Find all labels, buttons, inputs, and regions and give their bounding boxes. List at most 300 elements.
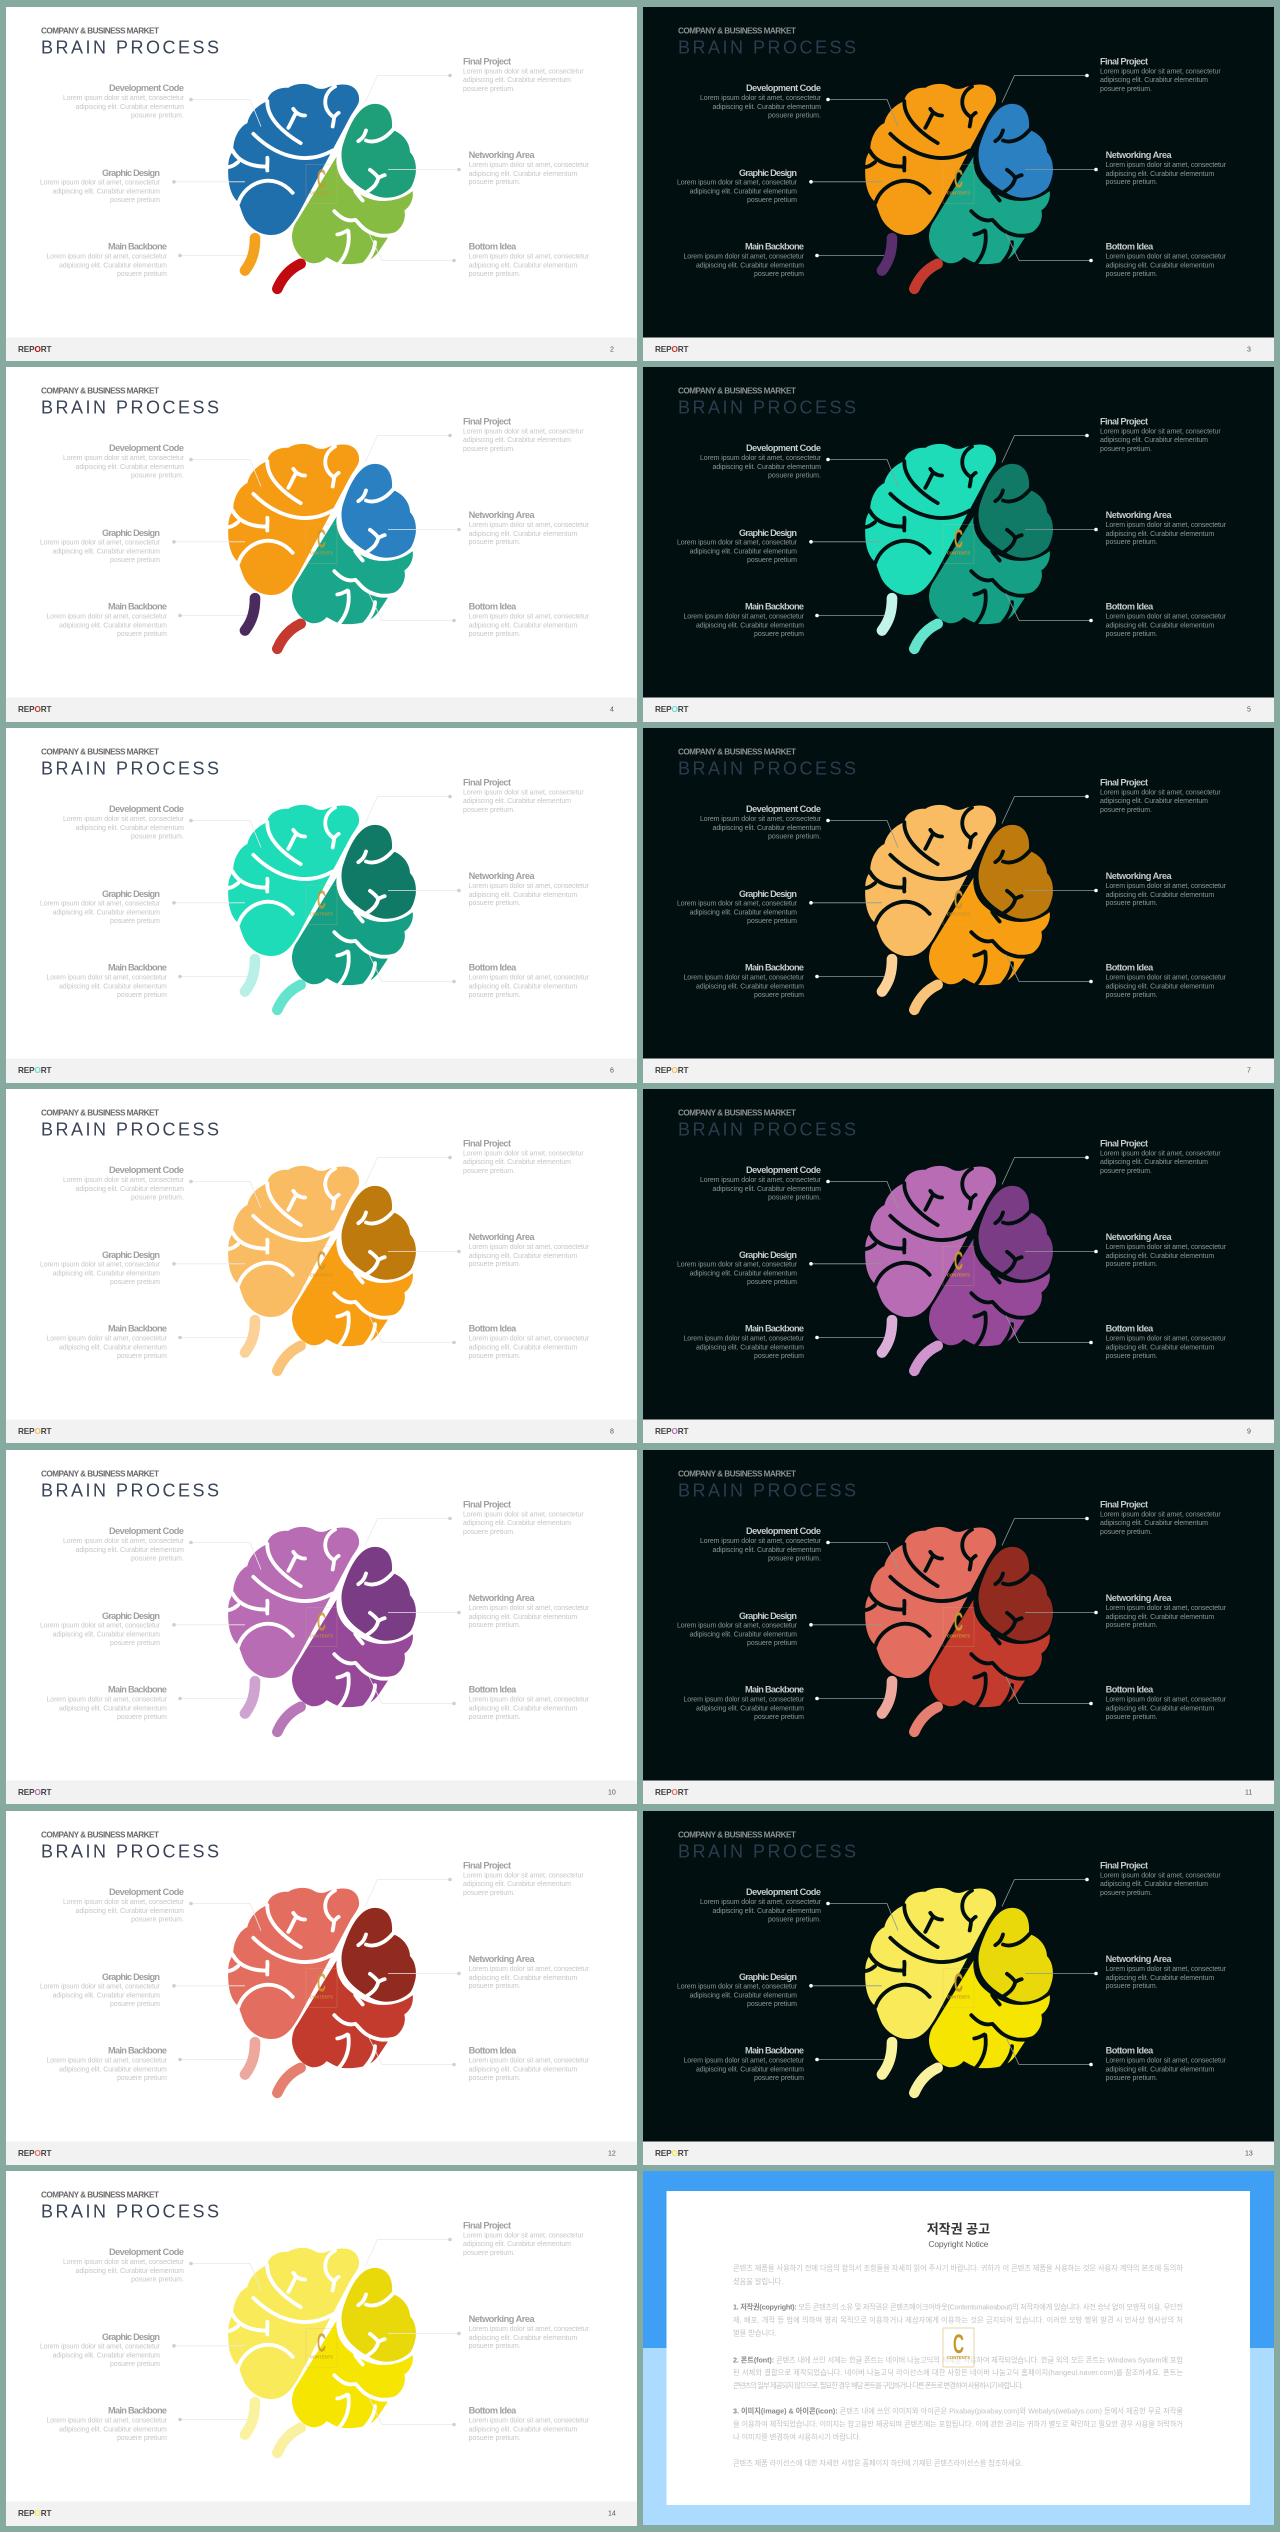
label: Final Project: adipiscing elit. Curabitur elementum (1100, 1159, 1208, 1166)
center logo mark: C (954, 1967, 963, 1997)
brain diagram (864, 444, 1053, 649)
connector: Networking Area (1025, 528, 1098, 532)
label: Bottom Idea: adipiscing elit. Curabitur elementum (1106, 1344, 1214, 1351)
slide background (6, 6, 637, 362)
center logo mark: C (317, 1245, 326, 1275)
label: Final Project (463, 1499, 584, 1536)
center logo mark: CONTENTS (947, 1272, 970, 1277)
center logo mark (306, 885, 337, 925)
label: Main Backbone: adipiscing elit. Curabitur elementum (59, 262, 167, 269)
footer bar: REPORT (655, 1788, 688, 1797)
label: Networking Area: adipiscing elit. Curabitur elementum (1106, 170, 1214, 177)
label: Networking Area: adipiscing elit. Curabitur elementum (469, 1974, 577, 1981)
label: Networking Area: Lorem ipsum dolor sit amet, consectetur (469, 1244, 590, 1251)
connector: Bottom Idea (1006, 2037, 1093, 2066)
label: Final Project: Final Project (463, 1139, 511, 1149)
label: Final Project: Lorem ipsum dolor sit amet, consectetur (1100, 1511, 1221, 1518)
center logo mark (943, 524, 974, 564)
label: Networking Area: adipiscing elit. Curabitur elementum (1106, 1613, 1214, 1620)
center logo mark: C (317, 2328, 326, 2358)
label: Bottom Idea: adipiscing elit. Curabitur elementum (469, 623, 577, 630)
label: Bottom Idea: Bottom Idea (469, 1324, 517, 1334)
footer bar (6, 2502, 637, 2527)
label: Development Code: Lorem ipsum dolor sit amet, consectetur (63, 94, 185, 102)
label: Development Code (700, 804, 822, 841)
label: Main Backbone: Main Backbone (108, 241, 167, 251)
label: Graphic Design (40, 1611, 161, 1647)
slide background (643, 1089, 1274, 1444)
connector: Networking Area (388, 1610, 461, 1614)
label: Main Backbone: posuere pretium (754, 1353, 804, 1360)
label: Networking Area: Lorem ipsum dolor sit amet, consectetur (469, 162, 590, 168)
label: Main Backbone (684, 2045, 805, 2082)
label: Final Project: Lorem ipsum dolor sit amet, consectetur (463, 68, 584, 75)
label: Development Code: posuere pretium. (131, 834, 184, 841)
subtitle: COMPANY & BUSINESS MARKET (41, 1469, 159, 1478)
connector: Main Backbone (815, 1336, 884, 1339)
title: BRAIN PROCESS (678, 37, 856, 57)
label: Bottom Idea (1106, 2045, 1227, 2082)
label: Main Backbone: posuere pretium (117, 992, 167, 999)
title: BRAIN PROCESS (678, 398, 856, 418)
label: Development Code: adipiscing elit. Curabitur elementum (712, 104, 821, 110)
label: Main Backbone: posuere pretium (117, 1353, 167, 1360)
label: Networking Area: posuere pretium. (469, 900, 521, 907)
label: Graphic Design (40, 528, 161, 564)
blue background top (643, 2171, 1274, 2348)
label: Networking Area: posuere pretium. (1106, 1261, 1158, 1268)
label: Graphic Design: adipiscing elit. Curabitur elementum (690, 549, 797, 556)
label: Bottom Idea: adipiscing elit. Curabitur elementum (1106, 2066, 1214, 2073)
slide 2: blue green brain on white (6, 7, 637, 361)
label: Graphic Design: posuere pretium (747, 557, 797, 564)
label: Final Project: adipiscing elit. Curabitur elementum (463, 77, 571, 84)
notice body text: 3. 이미지(image) & 아이콘(icon): 콘텐츠 내에 쓰인 이미지와 아이콘은 Pixabay(pixabay.com)와 Webalys(webalys.com) 등에서 제공한 무료 저작물 (733, 2406, 1183, 2416)
label: Graphic Design: Lorem ipsum dolor sit amet, consectetur (677, 179, 798, 186)
center logo mark: CONTENTS (310, 190, 333, 195)
connector: Main Backbone (178, 1696, 247, 1700)
notice title: 저작권 공고 (927, 2222, 990, 2236)
connector: Graphic Design (172, 1623, 245, 1626)
label: Development Code (63, 1526, 185, 1562)
footer bar: 11 (1245, 1789, 1252, 1796)
label: Development Code: Development Code (109, 443, 184, 453)
footer bar (6, 698, 637, 723)
label: Bottom Idea: posuere pretium. (469, 1714, 521, 1721)
connector: Bottom Idea (369, 1315, 456, 1344)
label: Main Backbone: Lorem ipsum dolor sit amet, consectetur (46, 1335, 168, 1342)
footer bar (643, 337, 1274, 362)
label: Final Project: posuere pretium. (1100, 1529, 1152, 1536)
label: Networking Area (1106, 1954, 1227, 1990)
label: Main Backbone: Lorem ipsum dolor sit amet, consectetur (46, 975, 168, 982)
title: BRAIN PROCESS (41, 398, 219, 418)
label: Development Code: adipiscing elit. Curabitur elementum (76, 1186, 184, 1193)
label: Bottom Idea: posuere pretium. (1106, 631, 1158, 638)
label: Final Project: Lorem ipsum dolor sit amet, consectetur (463, 2233, 584, 2240)
slide 9: purple brain on dark (643, 1089, 1274, 1443)
label: Networking Area: Lorem ipsum dolor sit amet, consectetur (1106, 522, 1227, 529)
label: Graphic Design (677, 168, 798, 204)
center logo mark: CONTENTS (310, 1633, 333, 1638)
label: Bottom Idea: Lorem ipsum dolor sit amet, consectetur (469, 1335, 590, 1342)
brain diagram (227, 444, 416, 649)
connector: Main Backbone (178, 2057, 247, 2061)
label: Final Project: posuere pretium. (463, 446, 515, 453)
label: Graphic Design: Lorem ipsum dolor sit amet, consectetur (677, 1622, 798, 1629)
center logo mark: C (317, 1606, 326, 1636)
connector: Main Backbone (178, 1336, 247, 1339)
label: Bottom Idea: posuere pretium. (469, 992, 521, 999)
brain diagram (227, 1887, 416, 2092)
slide background (6, 728, 637, 1083)
label: Final Project: adipiscing elit. Curabitur elementum (1100, 437, 1208, 444)
label: Final Project: Final Project (463, 56, 511, 66)
center logo mark (306, 2328, 337, 2368)
label: Main Backbone: posuere pretium (754, 2074, 804, 2082)
label: Networking Area: Networking Area (469, 1232, 535, 1242)
label: Development Code (63, 82, 185, 119)
label: Graphic Design: adipiscing elit. Curabitur elementum (53, 2353, 160, 2360)
label: Development Code: adipiscing elit. Curabitur elementum (76, 1908, 184, 1914)
slide 12: red brain on white (6, 1811, 637, 2165)
label: Bottom Idea: adipiscing elit. Curabitur elementum (469, 1344, 577, 1351)
label: Bottom Idea: adipiscing elit. Curabitur elementum (1106, 1705, 1214, 1712)
label: Graphic Design: Lorem ipsum dolor sit amet, consectetur (40, 2344, 161, 2351)
light blue background bottom (643, 2348, 1274, 2525)
label: Final Project (463, 1860, 584, 1896)
connector: Graphic Design (809, 1262, 882, 1265)
label: Development Code: Lorem ipsum dolor sit amet, consectetur (700, 1538, 822, 1545)
footer bar: 8 (610, 1428, 614, 1435)
connector: Development Code (189, 458, 261, 487)
connector: Development Code (189, 819, 261, 848)
brain diagram (227, 83, 416, 288)
label: Networking Area: Networking Area (469, 2314, 535, 2324)
label: Bottom Idea (1106, 602, 1227, 638)
footer bar: 14 (608, 2511, 616, 2518)
label: Bottom Idea: Lorem ipsum dolor sit amet, consectetur (469, 2057, 590, 2064)
label: Main Backbone (46, 241, 168, 278)
footer bar (643, 1419, 1274, 1444)
footer bar: REPORT (18, 1066, 52, 1075)
label: Final Project: Final Project (463, 417, 511, 427)
label: Final Project (1100, 1860, 1221, 1896)
label: Bottom Idea: adipiscing elit. Curabitur elementum (1106, 262, 1214, 269)
connector: Bottom Idea (369, 2398, 456, 2427)
label: Development Code: Development Code (746, 804, 821, 814)
label: Main Backbone: Lorem ipsum dolor sit amet, consectetur (684, 975, 805, 982)
label: Final Project: Final Project (463, 1860, 511, 1870)
label: Networking Area: posuere pretium. (1106, 179, 1158, 186)
label: Main Backbone: Main Backbone (745, 963, 804, 973)
label: Main Backbone: Lorem ipsum dolor sit amet, consectetur (684, 1696, 805, 1703)
connector: Bottom Idea (1006, 233, 1093, 262)
label: Graphic Design: adipiscing elit. Curabitur elementum (690, 1631, 797, 1638)
label: Development Code (63, 443, 185, 480)
label: Bottom Idea: posuere pretium. (469, 1353, 521, 1360)
footer bar (6, 2141, 637, 2166)
label: Main Backbone: Lorem ipsum dolor sit amet, consectetur (46, 614, 168, 621)
center logo mark: CONTENTS (947, 2355, 970, 2360)
label: Development Code: adipiscing elit. Curabitur elementum (76, 1547, 184, 1554)
label: Development Code (700, 1526, 822, 1562)
connector: Final Project (1002, 795, 1089, 824)
subtitle: COMPANY & BUSINESS MARKET (41, 748, 159, 757)
label: Final Project: Lorem ipsum dolor sit amet, consectetur (463, 1872, 584, 1879)
footer bar: REPORT (655, 1066, 688, 1075)
label: Main Backbone: posuere pretium (754, 1714, 804, 1721)
label: Final Project (1100, 56, 1221, 92)
label: Development Code: Lorem ipsum dolor sit amet, consectetur (63, 1177, 185, 1184)
label: Final Project: Final Project (463, 2221, 511, 2231)
connector: Final Project (1002, 1516, 1089, 1545)
label: Main Backbone (684, 241, 805, 278)
label: Graphic Design (677, 1611, 798, 1647)
label: Final Project: adipiscing elit. Curabitur elementum (463, 1520, 571, 1527)
label: Bottom Idea: adipiscing elit. Curabitur elementum (469, 262, 577, 269)
label: Final Project: Lorem ipsum dolor sit amet, consectetur (1100, 1872, 1221, 1879)
label: Bottom Idea: Bottom Idea (1106, 602, 1154, 612)
connector: Graphic Design (172, 540, 245, 544)
title: BRAIN PROCESS (678, 1480, 856, 1500)
footer bar: 6 (610, 1068, 614, 1075)
label: Graphic Design: posuere pretium (110, 1640, 160, 1647)
label: Main Backbone: posuere pretium (117, 1714, 167, 1721)
footer bar: REPORT (655, 344, 688, 354)
label: Main Backbone: Lorem ipsum dolor sit amet, consectetur (684, 253, 805, 260)
connector: Networking Area (388, 1971, 461, 1975)
label: Development Code: Development Code (109, 804, 184, 814)
label: Development Code: Development Code (746, 1165, 821, 1175)
center logo mark: CONTENTS (310, 1272, 333, 1277)
center logo mark (306, 1245, 337, 1285)
label: Networking Area: Networking Area (1106, 871, 1172, 881)
label: Final Project: posuere pretium. (1100, 85, 1152, 92)
label: Graphic Design: Graphic Design (739, 528, 797, 538)
footer bar: 7 (1247, 1068, 1251, 1075)
label: Graphic Design: posuere pretium (110, 2361, 160, 2368)
subtitle: COMPANY & BUSINESS MARKET (41, 387, 159, 396)
label: Bottom Idea: Bottom Idea (469, 1684, 517, 1694)
label: Bottom Idea: posuere pretium. (469, 2074, 521, 2082)
center logo mark (943, 1245, 974, 1285)
title: BRAIN PROCESS (41, 37, 219, 57)
label: Final Project: posuere pretium. (1100, 1168, 1152, 1175)
label: Development Code: Lorem ipsum dolor sit amet, consectetur (700, 1898, 822, 1906)
label: Final Project: Final Project (1100, 417, 1148, 427)
label: Final Project (463, 56, 584, 92)
label: Development Code: posuere pretium. (131, 1916, 184, 1923)
label: Development Code: Development Code (746, 82, 821, 92)
label: Networking Area: adipiscing elit. Curabitur elementum (469, 2335, 577, 2342)
label: Final Project: posuere pretium. (1100, 1889, 1152, 1896)
label: Main Backbone (46, 1684, 168, 1721)
label: Development Code: Development Code (109, 82, 184, 92)
center logo mark: C (317, 885, 326, 915)
title: BRAIN PROCESS (41, 1480, 219, 1500)
subtitle: COMPANY & BUSINESS MARKET (678, 26, 796, 35)
title: BRAIN PROCESS (678, 1841, 856, 1861)
footer bar: REPORT (18, 1427, 52, 1436)
label: Graphic Design: Lorem ipsum dolor sit amet, consectetur (677, 1261, 798, 1268)
label: Graphic Design: posuere pretium (747, 1279, 797, 1286)
notice body text (733, 2264, 1183, 2468)
connector: Final Project (365, 434, 452, 463)
label: Final Project: Lorem ipsum dolor sit amet, consectetur (1100, 68, 1221, 75)
label: Graphic Design (677, 889, 798, 925)
label: Development Code: adipiscing elit. Curabitur elementum (76, 2268, 184, 2275)
label: Networking Area: Networking Area (1106, 1954, 1172, 1964)
label: Networking Area: Networking Area (469, 871, 535, 881)
label: Development Code: posuere pretium. (131, 1194, 184, 1201)
center logo mark: CONTENTS (947, 1994, 970, 1999)
subtitle: COMPANY & BUSINESS MARKET (678, 1108, 796, 1117)
center logo mark: C (317, 1967, 326, 1997)
center logo mark: CONTENTS (310, 551, 333, 556)
connector: Main Backbone (815, 253, 884, 257)
label: Networking Area: posuere pretium. (469, 539, 521, 546)
label: Networking Area: posuere pretium. (469, 1622, 521, 1629)
slide background (643, 1450, 1274, 1805)
label: Bottom Idea: Bottom Idea (1106, 963, 1154, 973)
footer bar: REPORT (655, 1427, 688, 1436)
label: Graphic Design: Lorem ipsum dolor sit amet, consectetur (677, 540, 798, 547)
label: Final Project: Final Project (463, 1499, 511, 1509)
slide 5: teal brain on dark (643, 367, 1274, 722)
connector: Development Code (189, 97, 261, 126)
label: Bottom Idea: Lorem ipsum dolor sit amet, consectetur (1106, 2057, 1227, 2064)
connector: Development Code (826, 1901, 898, 1930)
footer bar: 5 (1247, 707, 1251, 714)
connector: Bottom Idea (369, 955, 456, 983)
brain diagram (864, 1527, 1053, 1731)
connector: Bottom Idea (369, 2037, 456, 2066)
center logo mark: C (953, 2329, 964, 2359)
slide background (6, 2171, 637, 2526)
notice body text: 벌을 받습니다. (733, 2328, 777, 2338)
slide background (643, 367, 1274, 722)
label: Development Code (63, 804, 185, 841)
label: Main Backbone: Main Backbone (745, 1324, 804, 1334)
slide 6: teal brain on white (6, 728, 637, 1083)
label: Networking Area (469, 1232, 590, 1268)
label: Main Backbone: adipiscing elit. Curabitur elementum (696, 1705, 804, 1712)
label: Development Code: adipiscing elit. Curabitur elementum (76, 825, 184, 832)
footer bar: REPORT (18, 705, 52, 714)
brain diagram (227, 2248, 416, 2453)
center logo mark: CONTENTS (947, 912, 970, 917)
connector: Main Backbone (815, 1696, 884, 1700)
label: Graphic Design: Graphic Design (102, 1250, 160, 1260)
label: Bottom Idea: Bottom Idea (469, 2045, 517, 2055)
label: Development Code: Lorem ipsum dolor sit amet, consectetur (700, 94, 822, 102)
footer bar: REPORT (18, 344, 52, 354)
label: Bottom Idea: Bottom Idea (1106, 1684, 1154, 1694)
label: Networking Area: Networking Area (1106, 1232, 1172, 1242)
label: Graphic Design: posuere pretium (110, 197, 160, 204)
notice body text: 재, 배포, 개작 등 법에 의하여 영리 목적으로 이용하거나 제삼자에게 이용하는 것은 금지되어 있습니다. 이러한 모방 행위 발견 시 민사상 형사상의 처 (733, 2316, 1183, 2324)
brain diagram (864, 83, 1053, 288)
slide 4: orange brain on white (6, 367, 637, 722)
label: Final Project: Lorem ipsum dolor sit amet, consectetur (463, 429, 584, 436)
label: Graphic Design: adipiscing elit. Curabitur elementum (53, 1631, 160, 1638)
label: Networking Area (469, 1954, 590, 1990)
label: Main Backbone (46, 963, 168, 999)
label: Main Backbone: Main Backbone (108, 2045, 167, 2055)
slide background (6, 367, 637, 722)
label: Development Code: adipiscing elit. Curabitur elementum (712, 1186, 821, 1193)
label: Graphic Design: Lorem ipsum dolor sit amet, consectetur (677, 1983, 798, 1990)
footer bar: REPORT (655, 2148, 688, 2158)
connector: Bottom Idea (369, 1676, 456, 1705)
label: Graphic Design: Lorem ipsum dolor sit amet, consectetur (40, 1622, 161, 1629)
center logo mark (943, 163, 974, 203)
connector: Graphic Design (172, 1984, 245, 1987)
label: Graphic Design (677, 528, 798, 564)
subtitle: COMPANY & BUSINESS MARKET (41, 1830, 159, 1839)
label: Graphic Design: adipiscing elit. Curabitur elementum (53, 910, 160, 917)
label: Networking Area: Lorem ipsum dolor sit amet, consectetur (469, 1966, 590, 1972)
label: Development Code: Development Code (746, 1886, 821, 1896)
label: Networking Area: Lorem ipsum dolor sit amet, consectetur (469, 883, 590, 890)
label: Development Code: adipiscing elit. Curabitur elementum (712, 464, 821, 471)
notice body text: 된 서체와 결합으로 제작되었습니다. 네이버 나눔고딕 라이선스에 대한 사항은 네이버 나눔고딕 홈페이지(hangeul.naver.com)를 참조하세요. 폰트는 (733, 2368, 1183, 2377)
label: Graphic Design (40, 168, 161, 204)
footer bar (6, 1419, 637, 1444)
center logo mark (943, 1967, 974, 2007)
center logo mark: CONTENTS (310, 2355, 333, 2360)
label: Networking Area: Networking Area (469, 150, 535, 160)
label: Bottom Idea (469, 963, 590, 999)
center logo mark (306, 163, 337, 203)
footer bar: 9 (1247, 1428, 1251, 1435)
slide background (6, 1089, 637, 1444)
connector: Networking Area (388, 1250, 461, 1253)
label: Main Backbone: posuere pretium (117, 631, 167, 638)
label: Networking Area (469, 510, 590, 546)
label: Bottom Idea: Lorem ipsum dolor sit amet, consectetur (1106, 253, 1227, 260)
brain diagram (864, 805, 1053, 1010)
footer bar: REPORT (18, 2509, 52, 2518)
center logo mark (943, 2328, 974, 2367)
connector: Networking Area (1025, 889, 1098, 892)
label: Bottom Idea (1106, 1324, 1227, 1360)
footer bar: REPORT (655, 705, 688, 714)
label: Networking Area: posuere pretium. (469, 1983, 521, 1990)
label: Development Code: posuere pretium. (768, 1194, 821, 1201)
label: Final Project: adipiscing elit. Curabitur elementum (463, 798, 571, 805)
label: Final Project: Lorem ipsum dolor sit amet, consectetur (1100, 1150, 1221, 1157)
footer bar: 10 (608, 1789, 616, 1796)
label: Networking Area: adipiscing elit. Curabitur elementum (469, 170, 577, 177)
center logo mark (943, 1606, 974, 1646)
label: Networking Area: posuere pretium. (1106, 1622, 1158, 1629)
label: Final Project: Final Project (1100, 1139, 1148, 1149)
label: Graphic Design: Lorem ipsum dolor sit amet, consectetur (677, 901, 798, 908)
label: Graphic Design: posuere pretium (747, 918, 797, 925)
notice body text: 콘텐츠의 일부 제공되지 않으므로, 필요한 경우 해당 폰트를 구입하거나 다른 폰트로 변경하여 사용하시기 바랍니다. (733, 2381, 1023, 2390)
slide 3: orange brain on dark (643, 7, 1274, 361)
connector: Final Project (365, 2238, 452, 2267)
label: Graphic Design: posuere pretium (110, 1279, 160, 1286)
label: Main Backbone (46, 2406, 168, 2442)
label: Main Backbone: Main Backbone (745, 602, 804, 612)
connector: Graphic Design (809, 901, 882, 905)
label: Final Project: Final Project (1100, 1499, 1148, 1509)
label: Graphic Design (677, 1972, 798, 2008)
label: Final Project: adipiscing elit. Curabitur elementum (1100, 1520, 1208, 1527)
